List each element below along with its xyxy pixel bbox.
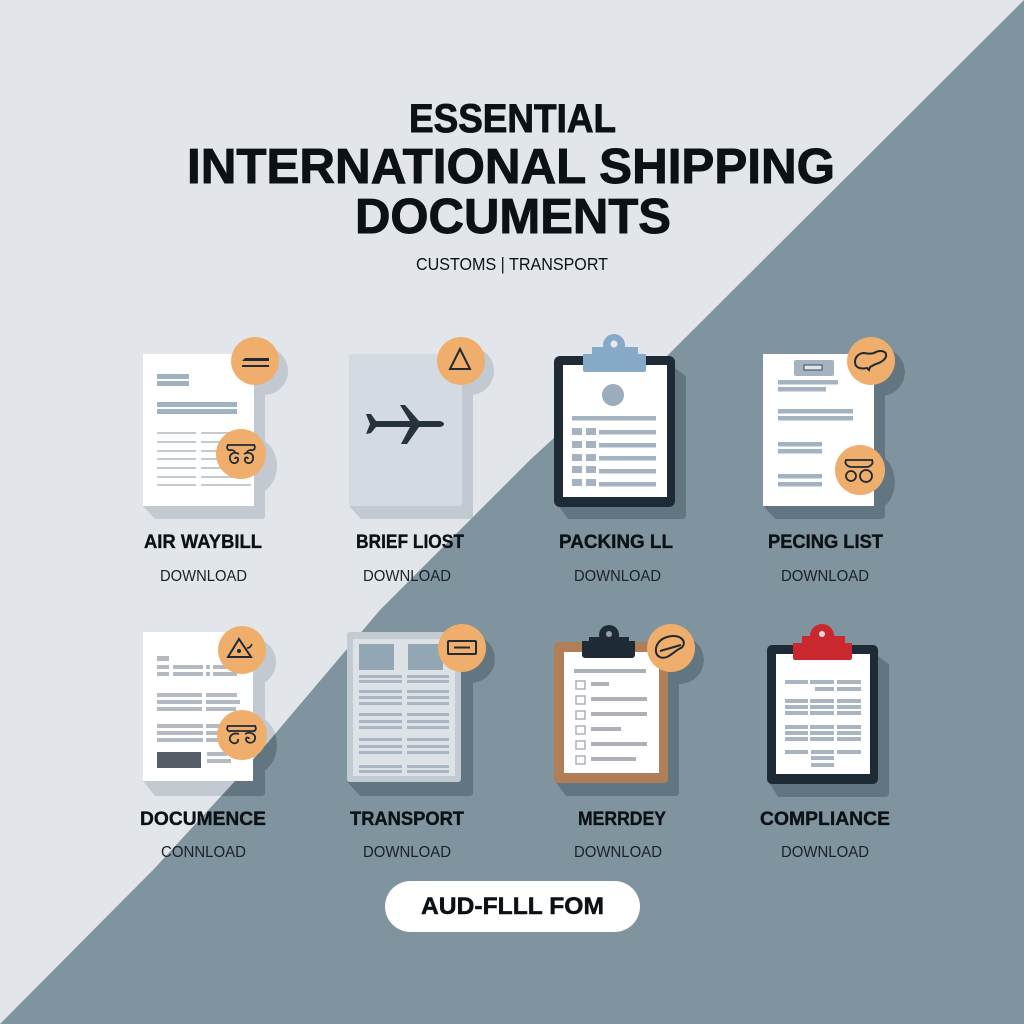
icon: badge ornament xyxy=(216,429,266,479)
document sheet xyxy=(143,632,253,781)
title: INTERNATIONAL SHIPPING xyxy=(187,139,835,194)
icon: badge loop xyxy=(847,337,895,385)
clipboard xyxy=(554,334,675,507)
download link: DOWNLOAD xyxy=(574,568,661,585)
card: pecing list xyxy=(763,337,895,585)
download link: DOWNLOAD xyxy=(363,568,451,585)
label: AIR WAYBILL xyxy=(144,531,262,553)
icon: airplane xyxy=(366,405,444,444)
icon: badge rectangle xyxy=(438,624,486,672)
label: TRANSPORT xyxy=(350,808,464,830)
document sheet xyxy=(763,354,874,506)
button xyxy=(385,881,640,932)
download link: CONNLOAD xyxy=(161,844,246,861)
card: brief list xyxy=(349,337,485,585)
button: AUD-FLLL FOM xyxy=(421,893,604,920)
icon: badge loop xyxy=(647,624,695,672)
card shadows xyxy=(143,347,905,797)
label: DOCUMENCE xyxy=(140,808,266,830)
title xyxy=(187,97,835,244)
label: COMPLIANCE xyxy=(760,808,890,830)
card: merrdey xyxy=(554,624,695,861)
card: transport xyxy=(347,624,486,861)
icon: badge triangle xyxy=(437,337,485,385)
card: packing list xyxy=(554,334,675,585)
icon: badge warning xyxy=(218,626,266,674)
label: MERRDEY xyxy=(578,808,666,830)
icon: badge bar xyxy=(231,337,279,385)
label: PECING LIST xyxy=(768,531,883,553)
download link: DOWNLOAD xyxy=(781,844,869,861)
download link: DOWNLOAD xyxy=(781,568,869,585)
title: DOCUMENTS xyxy=(355,189,671,244)
card: documence xyxy=(140,626,267,861)
download link: DOWNLOAD xyxy=(574,844,662,861)
clipboard xyxy=(554,625,668,783)
download link: DOWNLOAD xyxy=(363,844,451,861)
label: PACKING LL xyxy=(559,531,673,553)
card: air waybill xyxy=(143,337,279,585)
document sheet xyxy=(347,632,461,782)
label: BRIEF LIOST xyxy=(356,531,464,553)
title: ESSENTIAL xyxy=(409,97,616,141)
card: compliance xyxy=(760,624,890,861)
icon: badge ornament xyxy=(835,445,885,495)
document sheet xyxy=(143,354,254,506)
icon: badge ornament xyxy=(217,710,267,760)
document sheet xyxy=(349,354,462,506)
download link: DOWNLOAD xyxy=(160,568,247,585)
clipboard xyxy=(767,624,878,784)
subtitle: CUSTOMS | TRANSPORT xyxy=(416,254,608,274)
